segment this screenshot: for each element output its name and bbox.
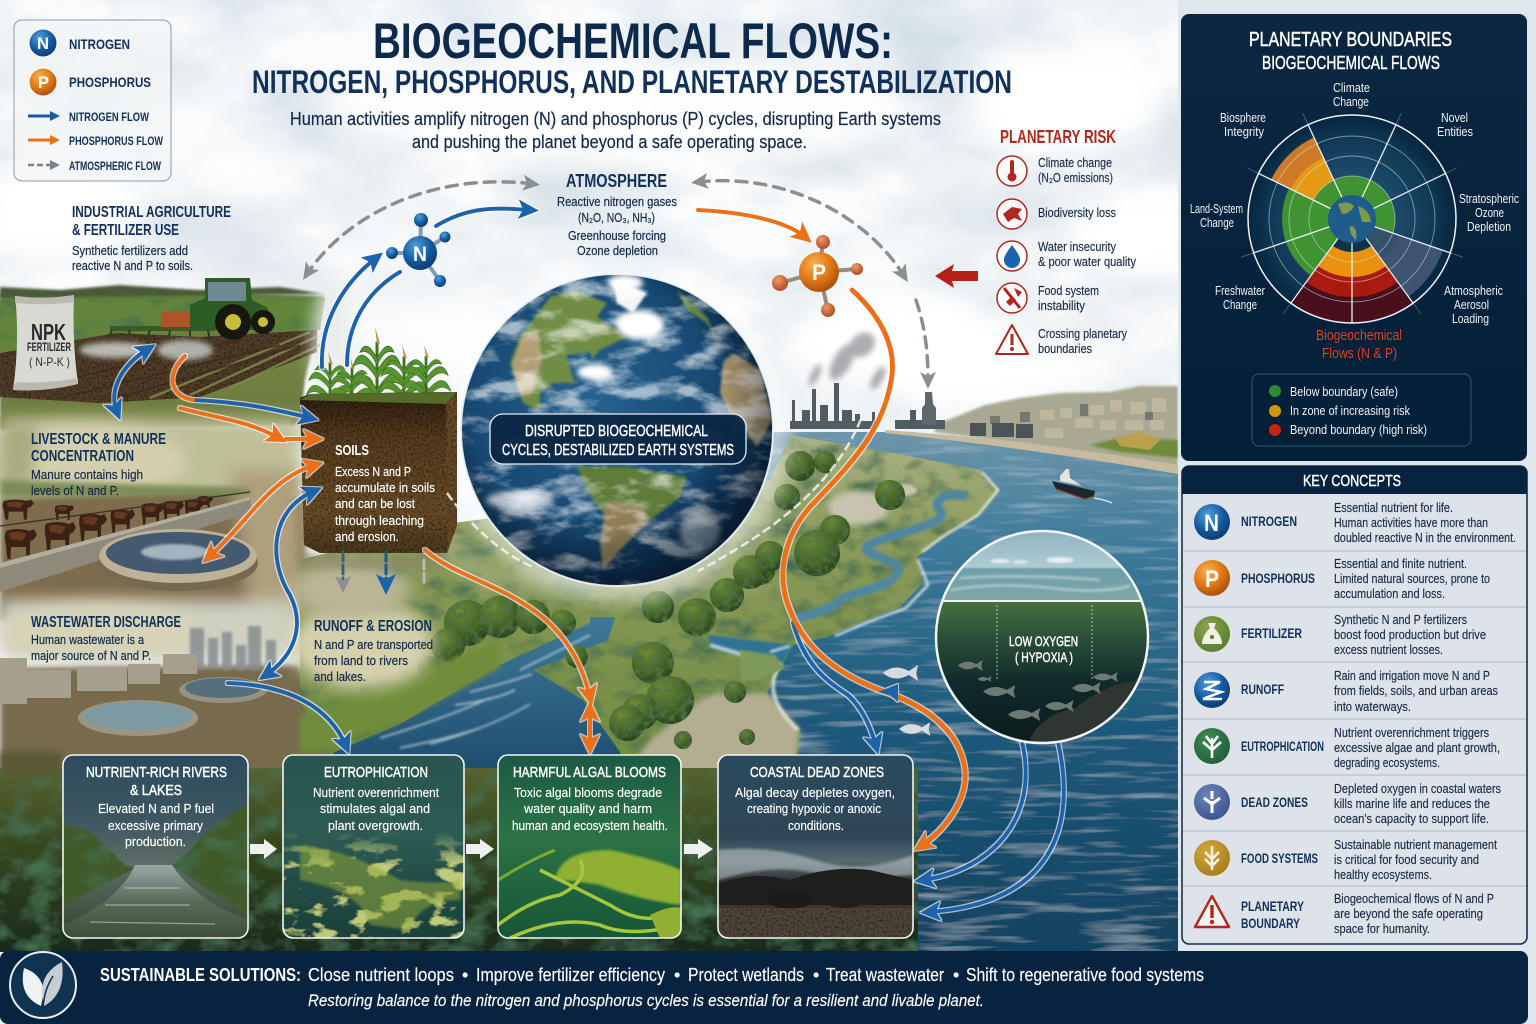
text: wastewater discharge: major source of N and P.	[31, 648, 151, 663]
concept: fertilizer: excess nutrient losses.	[1334, 643, 1443, 657]
legend: PHOSPHORUS FLOW	[69, 134, 164, 148]
soils text: Excess N and P	[335, 464, 411, 479]
card text: EUTROPHICATION	[324, 765, 428, 781]
legend: PHOSPHORUS	[69, 74, 151, 90]
arrow: rivers to eutrophication	[250, 839, 277, 859]
solutions text: •	[674, 965, 680, 985]
concept: phosphorus: PHOSPHORUS	[1241, 571, 1315, 586]
highlighted label: biogeochemical flows: Flows (N & P)	[1322, 346, 1397, 362]
text: livestock and manure: levels of N and P.	[31, 483, 119, 498]
text: livestock and manure: CONCENTRATION	[31, 448, 134, 465]
highlighted label: biogeochemical flows	[1316, 328, 1402, 362]
process card: eutrophication	[283, 755, 464, 938]
card text: Nutrient overenrichment	[313, 785, 439, 800]
concept: runoff: Rain and irrigation move N and P	[1334, 669, 1490, 683]
concept: eutrophication: EUTROPHICATION	[1241, 739, 1324, 754]
text: industrial agriculture	[72, 204, 231, 273]
phosphorus flows	[173, 210, 965, 846]
card text: Toxic algal blooms degrade	[514, 785, 662, 800]
card text: & LAKES	[130, 783, 182, 799]
text: crossing boundaries: boundaries	[1038, 342, 1092, 356]
card text: NUTRIENT-RICH RIVERS	[86, 765, 227, 781]
concept: planetary boundary: Biogeochemical flows of N and P	[1334, 892, 1494, 906]
panel heading	[1249, 29, 1452, 73]
card text: HARMFUL ALGAL BLOOMS	[513, 765, 666, 781]
NPK fertilizer bag: NPK	[31, 319, 66, 345]
solutions text: Improve fertilizer efficiency	[476, 965, 665, 985]
concept: planetary boundary: PLANETARY	[1241, 899, 1304, 914]
small islets	[740, 650, 785, 680]
forest strip behind cards	[0, 768, 918, 952]
highlighted label: biogeochemical flows: Biogeochemical	[1316, 328, 1402, 344]
NPK fertilizer bag: ( N-P-K )	[29, 355, 70, 369]
earth label: CYCLES, DESTABILIZED EARTH SYSTEMS	[502, 442, 734, 459]
card text: excessive primary	[108, 818, 203, 833]
subtitle text: Human activities amplify nitrogen (N) and phosphorus (P) cycles, disrupting Earth systems	[290, 109, 941, 129]
hypoxia label: ( HYPOXIA )	[1015, 650, 1073, 665]
text: wastewater discharge: WASTEWATER DISCHARGE	[31, 614, 181, 631]
legend: NITROGEN	[69, 36, 130, 52]
NPK fertilizer bag: FERTILIZER	[27, 340, 71, 354]
concept: planetary boundary: space for humanity.	[1334, 922, 1430, 936]
hypoxia inset	[936, 531, 1148, 745]
text: food system: instability	[1038, 299, 1086, 313]
icon: warning triangle	[996, 325, 1028, 354]
radar labels: Novel	[1441, 111, 1468, 125]
fog behind livestock text	[0, 418, 300, 498]
arrow: eutrophication to algal blooms	[466, 839, 494, 859]
text: climate change: Climate change	[1038, 156, 1112, 170]
soil block with crops	[300, 327, 457, 570]
process card: coastal dead zones	[718, 755, 913, 938]
text: atmosphere: Greenhouse forcing	[568, 228, 666, 243]
concept: food systems: Sustainable nutrient management	[1334, 838, 1497, 852]
solutions text: Treat wastewater	[826, 965, 944, 985]
radar labels: Stratospheric	[1459, 192, 1519, 206]
card text: Algal decay depletes oxygen,	[735, 785, 895, 800]
soils text: SOILS	[335, 442, 369, 459]
concept: runoff: from fields, soils, and urban areas	[1334, 684, 1498, 698]
concept: phosphorus: P	[1205, 566, 1219, 593]
text: biodiversity loss: Biodiversity loss	[1038, 206, 1116, 220]
text: industrial agriculture: INDUSTRIAL AGRICULTURE	[72, 204, 231, 221]
nitrogen flows	[114, 209, 1064, 912]
card text: stimulates algal and	[320, 801, 430, 816]
text: atmosphere: Reactive nitrogen gases	[557, 194, 677, 209]
central land and delta	[300, 435, 1000, 780]
earth globe with disrupted cycles label	[461, 274, 773, 586]
text: livestock and manure: Manure contains high	[31, 467, 143, 482]
concept: planetary boundary	[1195, 892, 1494, 936]
concept: phosphorus	[1194, 557, 1490, 601]
earth label: DISRUPTED BIOGEOCHEMICAL	[525, 423, 708, 440]
fog and wastewater sky	[0, 600, 300, 660]
process card: harmful algal blooms	[498, 755, 681, 938]
nitrogen molecule	[386, 213, 450, 287]
dashed arc around the globe	[447, 419, 861, 571]
background scene: sky, landscape and ocean	[0, 0, 1200, 952]
concept: nitrogen: Essential nutrient for life.	[1334, 501, 1453, 515]
panel heading: PLANETARY BOUNDARIES	[1249, 29, 1452, 51]
panel: planetary risk	[996, 127, 1137, 356]
radar labels: Biosphere	[1220, 111, 1266, 125]
coastal foam	[770, 472, 998, 652]
small blue arrowhead on estuary	[878, 684, 898, 702]
soils text: and can be lost	[335, 496, 415, 511]
concept: fertilizer	[1194, 613, 1486, 657]
text: food system: Food system	[1038, 284, 1099, 298]
trees	[418, 451, 905, 749]
text: runoff and erosion: from land to rivers	[314, 653, 408, 668]
radar labels: Ozone	[1475, 206, 1504, 220]
card text	[313, 765, 439, 833]
concept: food systems: FOOD SYSTEMS	[1241, 851, 1318, 866]
text: atmosphere	[557, 171, 677, 258]
concept: planetary boundary: BOUNDARY	[1241, 916, 1300, 931]
radar labels: Change	[1333, 95, 1369, 109]
legend: N	[37, 34, 49, 53]
text: industrial agriculture: reactive N and P to soils.	[72, 259, 193, 273]
solutions text: Shift to regenerative food systems	[966, 965, 1204, 985]
radar labels: Change	[1200, 216, 1234, 230]
arrow: risk pointer	[935, 264, 978, 288]
earth label	[490, 414, 746, 464]
text: runoff and erosion: N and P are transported	[314, 637, 433, 652]
solutions text: •	[953, 965, 959, 985]
solutions text: Close nutrient loops	[308, 965, 454, 985]
card text: conditions.	[788, 818, 844, 833]
radar chart	[1241, 113, 1463, 323]
subtitle text: and pushing the planet beyond a safe operating space.	[412, 132, 807, 152]
concept: dead zones: kills marine life and reduces the	[1334, 797, 1490, 811]
text: water insecurity	[1038, 240, 1137, 269]
icon: biodiversity	[997, 199, 1027, 229]
radar labels: Atmospheric	[1444, 284, 1503, 298]
text: crossing boundaries	[1038, 327, 1128, 356]
text: industrial agriculture: & FERTILIZER USE	[72, 222, 179, 239]
livestock feedlot and manure lagoon	[0, 492, 258, 592]
corn plants	[306, 327, 451, 412]
concept: dead zones: DEAD ZONES	[1241, 795, 1308, 810]
concept: runoff	[1194, 669, 1498, 714]
left field	[0, 292, 325, 430]
concept: eutrophication: excessive algae and plant growth,	[1334, 741, 1500, 755]
NPK fertilizer bag	[13, 295, 78, 390]
title: NITROGEN, PHOSPHORUS, AND PLANETARY DESTABILIZATION	[252, 64, 1012, 100]
text: water insecurity: & poor water quality	[1038, 255, 1137, 269]
soils text: and erosion.	[335, 529, 399, 544]
concept: dead zones: Depleted oxygen in coastal waters	[1334, 782, 1501, 796]
text: climate change: (N₂O emissions)	[1038, 171, 1113, 185]
concept: fertilizer: Synthetic N and P fertilizers	[1334, 613, 1467, 627]
subtitle text	[290, 109, 941, 152]
title	[252, 12, 1012, 100]
solutions text: Restoring balance to the nitrogen and phosphorus cycles is essential for a resilient and livable planet.	[308, 991, 984, 1010]
text: runoff and erosion: RUNOFF & EROSION	[314, 618, 432, 635]
hypoxia label: LOW OXYGEN	[1009, 634, 1078, 649]
concept: fertilizer: boost food production but drive	[1334, 628, 1486, 642]
legend: NITROGEN FLOW	[69, 110, 150, 124]
concept: nitrogen: NITROGEN	[1241, 514, 1297, 529]
runoff dashed arrows	[343, 552, 424, 586]
concept: eutrophication: degrading ecosystems.	[1334, 756, 1440, 770]
card text	[735, 765, 895, 833]
radar labels: Integrity	[1224, 125, 1265, 139]
concept: food systems: is critical for food security and	[1334, 853, 1479, 867]
text: industrial agriculture: Synthetic fertilizers add	[72, 244, 188, 258]
hypoxia label	[1009, 634, 1078, 665]
legend: ATMOSPHERIC FLOW	[69, 159, 161, 173]
text: wastewater discharge: Human wastewater is a	[31, 632, 145, 647]
phosphorus molecule: P	[812, 260, 826, 285]
flow arrows	[114, 181, 1064, 912]
solutions text: SUSTAINABLE SOLUTIONS:	[100, 965, 301, 985]
tractor with implement	[79, 278, 275, 360]
ocean	[740, 432, 1178, 952]
card text	[512, 765, 668, 833]
distant industrial city and river bank	[790, 328, 1178, 474]
concept: nitrogen: Human activities have more than	[1334, 516, 1488, 530]
wastewater treatment plant and city skyline	[0, 626, 276, 736]
concept: phosphorus: accumulation and loss.	[1334, 587, 1445, 601]
concept: planetary boundary: are beyond the safe operating	[1334, 907, 1483, 921]
text: livestock and manure: LIVESTOCK & MANURE	[31, 431, 166, 448]
radar labels: Entities	[1437, 125, 1473, 139]
concept: dead zones: ocean's capacity to support life.	[1334, 812, 1489, 826]
concept: eutrophication: Nutrient overenrichment triggers	[1334, 726, 1489, 740]
radar legend: Below boundary (safe)	[1290, 385, 1398, 399]
radar labels: Freshwater	[1215, 284, 1265, 298]
radar labels: Depletion	[1467, 220, 1511, 234]
atmospheric dashed flows	[307, 181, 928, 382]
solutions text: •	[462, 965, 468, 985]
feedlot ground	[0, 488, 305, 620]
radar legend: Beyond boundary (high risk)	[1290, 423, 1427, 437]
card text: COASTAL DEAD ZONES	[750, 765, 884, 781]
text: atmosphere: ATMOSPHERE	[566, 171, 667, 191]
panel: planetary boundaries	[1181, 14, 1527, 461]
card text: human and ecosystem health.	[512, 818, 668, 833]
text: water insecurity: Water insecurity	[1038, 240, 1117, 254]
panel: planetary risk: PLANETARY RISK	[1000, 127, 1116, 147]
text: atmosphere: Ozone depletion	[577, 243, 658, 258]
card text: water quality and harm	[523, 801, 652, 816]
manure lagoon tank	[98, 529, 258, 591]
radar legend	[1252, 374, 1471, 446]
swimming fish near the estuary	[883, 665, 930, 736]
solutions text	[100, 965, 1204, 1010]
text: runoff and erosion	[314, 618, 433, 684]
card text: creating hypoxic or anoxic	[747, 801, 881, 816]
key concepts heading: KEY CONCEPTS	[1303, 473, 1401, 490]
farm scene: field, tractor and fertilizer bag	[13, 278, 275, 390]
arrow: algal blooms to dead zones	[684, 839, 713, 859]
radar labels: Climate	[1333, 81, 1370, 95]
nitrogen molecule: N	[413, 243, 427, 266]
concept: runoff: into waterways.	[1334, 700, 1411, 714]
icon: thermometer	[997, 156, 1027, 186]
ship on the ocean	[1052, 469, 1112, 503]
card text: Elevated N and P fuel	[98, 801, 214, 816]
concept: nitrogen	[1194, 501, 1516, 545]
right column backdrop	[1178, 0, 1536, 1024]
fog behind runoff text	[290, 601, 434, 689]
radar labels: Change	[1223, 298, 1257, 312]
panel: key concepts	[1182, 466, 1527, 944]
text: livestock and manure	[31, 431, 166, 498]
solid flows with pale outline	[114, 209, 1064, 912]
icon: water drop	[997, 241, 1027, 271]
concept: fertilizer: FERTILIZER	[1241, 626, 1302, 641]
panel heading: BIOGEOCHEMICAL FLOWS	[1262, 53, 1440, 73]
radar labels: Land-System	[1190, 202, 1243, 216]
text: food system	[1038, 284, 1099, 313]
icon: leaf badge	[10, 952, 76, 1018]
radar labels: Aerosol	[1454, 298, 1489, 312]
sustainable solutions bar	[0, 951, 1528, 1024]
text: crossing boundaries: Crossing planetary	[1038, 327, 1128, 341]
icon: food system	[997, 283, 1027, 313]
concept: food systems: healthy ecosystems.	[1334, 868, 1432, 882]
text: wastewater discharge	[31, 614, 181, 663]
concept: runoff: RUNOFF	[1241, 682, 1284, 697]
process card: nutrient-rich rivers and lakes	[63, 755, 248, 938]
radar labels	[1190, 81, 1519, 326]
small earth centre	[1328, 195, 1376, 243]
concept: nitrogen: N	[1204, 510, 1219, 537]
radar legend: In zone of increasing risk	[1290, 404, 1411, 418]
soils text: accumulate in soils	[335, 480, 435, 495]
card text: plant overgrowth.	[328, 818, 423, 833]
text: runoff and erosion: and lakes.	[314, 669, 366, 684]
concept: food systems	[1194, 838, 1497, 882]
inner delta channel	[790, 495, 967, 620]
text: climate change	[1038, 156, 1113, 185]
soils text	[335, 442, 435, 544]
radar labels: Loading	[1452, 312, 1489, 326]
soils text: through leaching	[335, 513, 424, 528]
card text	[86, 765, 227, 849]
river mouth and sand peninsula	[708, 635, 793, 663]
main river	[300, 617, 630, 780]
text: atmosphere: (N₂O, NO₃, NH₃)	[578, 210, 655, 225]
concept: dead zones	[1194, 782, 1501, 826]
concept: phosphorus: Essential and finite nutrient.	[1334, 557, 1467, 571]
concept: eutrophication	[1194, 726, 1500, 770]
card text: production.	[125, 834, 186, 849]
phosphorus molecule	[772, 235, 863, 317]
solutions text: Protect wetlands	[688, 965, 804, 985]
concept: phosphorus: Limited natural sources, prone to	[1334, 572, 1490, 586]
solutions text: •	[813, 965, 819, 985]
title: BIOGEOCHEMICAL FLOWS:	[373, 12, 893, 69]
legend: P	[38, 73, 49, 92]
legend	[14, 20, 171, 181]
